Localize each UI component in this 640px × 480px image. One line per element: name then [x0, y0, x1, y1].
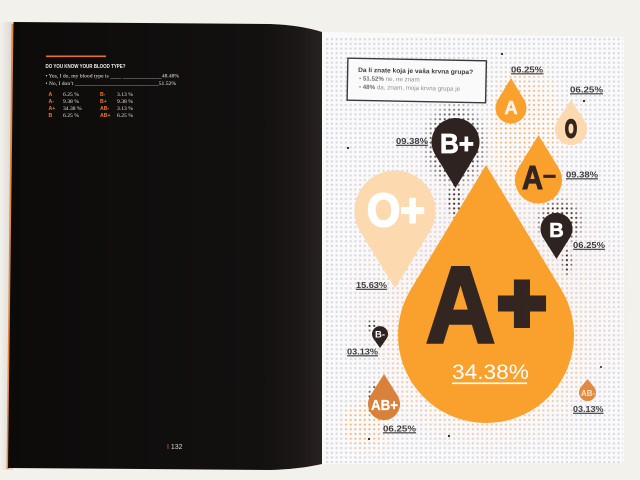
panel: left black page	[0, 22, 322, 470]
label: B 06.25%: 06.25%	[573, 240, 605, 250]
survey answers: • No, I don’t ______________________________51.52%	[46, 81, 176, 87]
orange rule	[46, 56, 106, 57]
drop: AB+	[368, 374, 400, 420]
pin: B+: B+	[440, 128, 474, 159]
drop: O: O	[565, 116, 577, 144]
blood type percentage table: 9.38 %	[117, 99, 133, 105]
blood type percentage table: AB-	[100, 106, 109, 112]
blood type percentage table: AB+	[100, 113, 111, 119]
blood type percentage table: A	[48, 92, 52, 98]
drop: AB+: AB+	[371, 397, 398, 414]
blood type percentage table: 3.13 %	[117, 92, 133, 98]
pin: B-: B-	[375, 330, 385, 340]
drop: A+ main: +	[498, 258, 546, 349]
heading: do you know your blood type: DO YOU KNOW YOUR BLOOD TYPE?	[46, 64, 126, 70]
blood type percentage table: A-	[48, 99, 54, 105]
label: A- 09.38%: 09.38%	[566, 170, 598, 180]
blood type percentage table: 3.13 %	[117, 106, 133, 112]
pin: B: B	[549, 220, 564, 242]
callout: survey question box	[347, 58, 486, 103]
callout: survey question box: • 48% da, znam, moja krvna grupa je	[359, 84, 461, 93]
blood type percentage table: 6.25 %	[117, 113, 133, 119]
survey answers: • Yes, I do, my blood type is ____ ______________48.48%	[46, 74, 179, 80]
drop: A+ main: 34.38%	[452, 361, 529, 384]
label: O+ 15.63%: 15.63%	[356, 280, 387, 290]
blood type percentage table: B-	[100, 92, 106, 98]
blood type percentage table: A+	[48, 106, 55, 112]
drop: AB-	[579, 379, 596, 401]
label: O 06.25%: 06.25%	[570, 84, 603, 94]
label: AB+ 06.25%: 06.25%	[383, 424, 416, 434]
label: B+ 09.38%: 09.38%	[396, 136, 428, 146]
drop: A+ main	[398, 165, 574, 423]
drop: O	[555, 100, 587, 145]
callout: survey question box: • 51.52% ne, ne znam	[359, 75, 420, 84]
label: B- 03.13%: 03.13%	[347, 346, 378, 356]
panel: right dotted page	[322, 32, 640, 470]
page number: I 132	[167, 444, 183, 451]
pin: B+	[432, 118, 480, 188]
blood type percentage table: B+	[100, 99, 107, 105]
blood type percentage table	[48, 92, 133, 119]
label: AB- 03.13%: 03.13%	[573, 404, 604, 414]
pin: B-	[372, 326, 388, 348]
blood type percentage table: B	[48, 113, 52, 119]
survey answers	[46, 74, 179, 87]
blood type percentage table: 6.25 %	[63, 92, 79, 98]
blood type percentage table: 9.38 %	[63, 99, 79, 105]
drop: A-	[515, 135, 562, 204]
drop: A+ main: A	[426, 244, 495, 365]
drop: AB-: AB-	[581, 389, 595, 398]
label: A 06.25%: 06.25%	[511, 64, 543, 74]
blood type percentage table: 6.25 %	[63, 113, 79, 119]
callout: survey question box: Da li znate koja je vaša krvna grupa?	[358, 67, 473, 76]
drop: O+	[354, 171, 436, 288]
drop: A	[496, 78, 526, 123]
drop: O+: O+	[367, 184, 425, 236]
drop: A: A	[504, 97, 518, 118]
blood type percentage table: 34.38 %	[63, 106, 82, 112]
drop: A-: A	[522, 159, 543, 196]
pin: B	[540, 213, 572, 259]
drop: A-: –	[543, 162, 556, 189]
